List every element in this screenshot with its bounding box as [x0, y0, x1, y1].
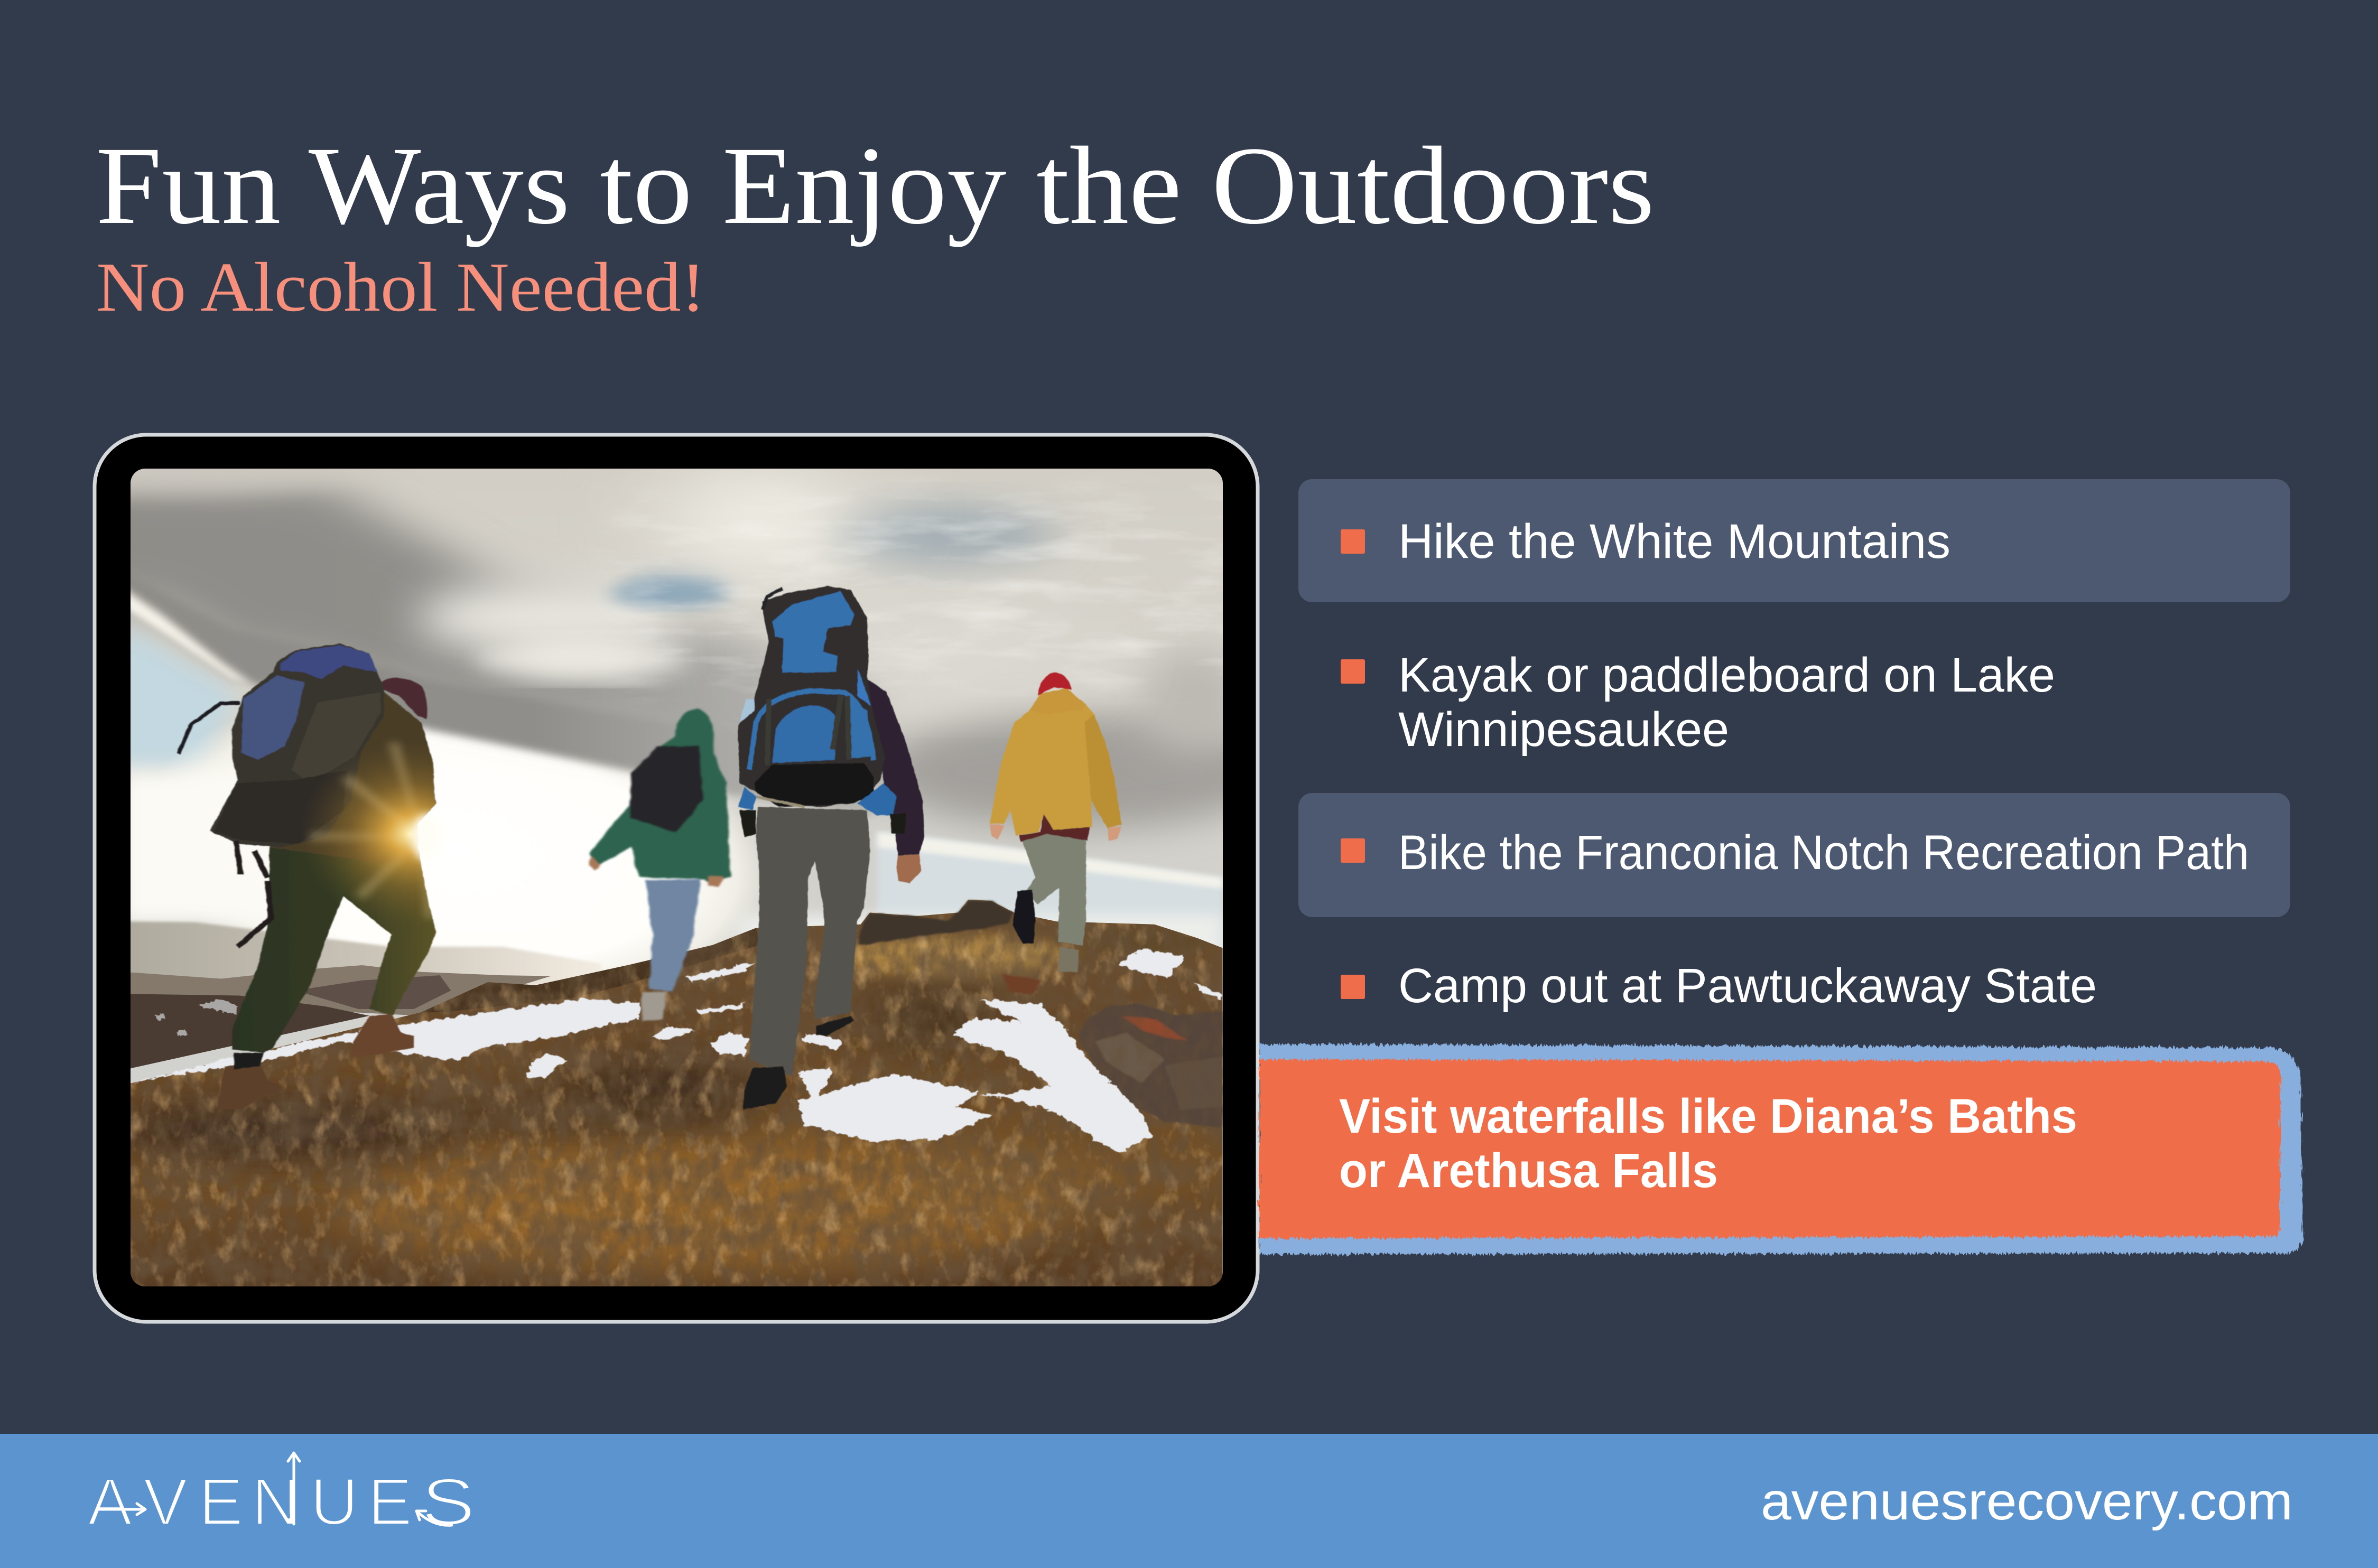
- sun, cloud band and mountains, left side: [131, 469, 1222, 1494]
- footer bar: [0, 1434, 2378, 1568]
- website url: avenuesrecovery.com: [1761, 1472, 2293, 1531]
- logo: AVENUES: S: [421, 1464, 476, 1539]
- right rock face: [1002, 974, 1223, 1130]
- sunburst: [299, 740, 522, 928]
- hiker 4: yellow jacket, red hat: [990, 672, 1121, 972]
- photo: hikers on a snowy ridge at sunrise: [0, 440, 1281, 1286]
- snow patches: [132, 949, 1223, 1153]
- bullet: [1341, 838, 1365, 863]
- ridge rocks: [858, 900, 1014, 945]
- subtitle: No Alcohol Needed!: [96, 248, 705, 326]
- title: Fun Ways to Enjoy the Outdoors: [96, 124, 1655, 247]
- logo arrows: [97, 1453, 452, 1525]
- hiker 3: blue backpack: [738, 586, 924, 1109]
- clouds and pale sky, right side: [131, 469, 1223, 1494]
- logo: AVENUES: AVENUE: [88, 1464, 412, 1539]
- distant mountains: [125, 921, 601, 985]
- hiker 2: green jacket, black backpack: [589, 708, 730, 1021]
- hillside ground: [103, 708, 1223, 1286]
- highlighted callout: waterfalls: or Arethusa Falls: [1339, 1144, 1718, 1198]
- list row 2: Kayak or paddleboard: Kayak or paddleboard on Lake: [1398, 648, 2055, 702]
- highlighted callout: waterfalls: [1259, 1044, 2303, 1254]
- list row 1: Hike the White Mountains: [1298, 479, 2290, 602]
- list row 2: Kayak or paddleboard: Winnipesaukee: [1398, 703, 1729, 757]
- bullet: [1341, 529, 1365, 554]
- tablet frame with hiking photo: [0, 435, 1281, 1322]
- hiker 3 and hiker 4: [738, 586, 1121, 1109]
- list row 3: Bike the Franconia Notch: [1298, 793, 2290, 917]
- list row 4: Camp out at Pawtuckaway State: Camp out at Pawtuckaway State: [1398, 959, 2097, 1013]
- list row 1: Hike the White Mountains: Hike the White Mountains: [1398, 515, 1950, 568]
- list row 2: Kayak or paddleboard: [1341, 648, 2055, 757]
- highlighted callout: waterfalls: Visit waterfalls like Diana’s Baths: [1339, 1089, 2077, 1143]
- list row 3: Bike the Franconia Notch: Bike the Franconia Notch Recreation Path: [1398, 826, 2249, 880]
- hiker 1: large pack, sunburst: [179, 643, 522, 1109]
